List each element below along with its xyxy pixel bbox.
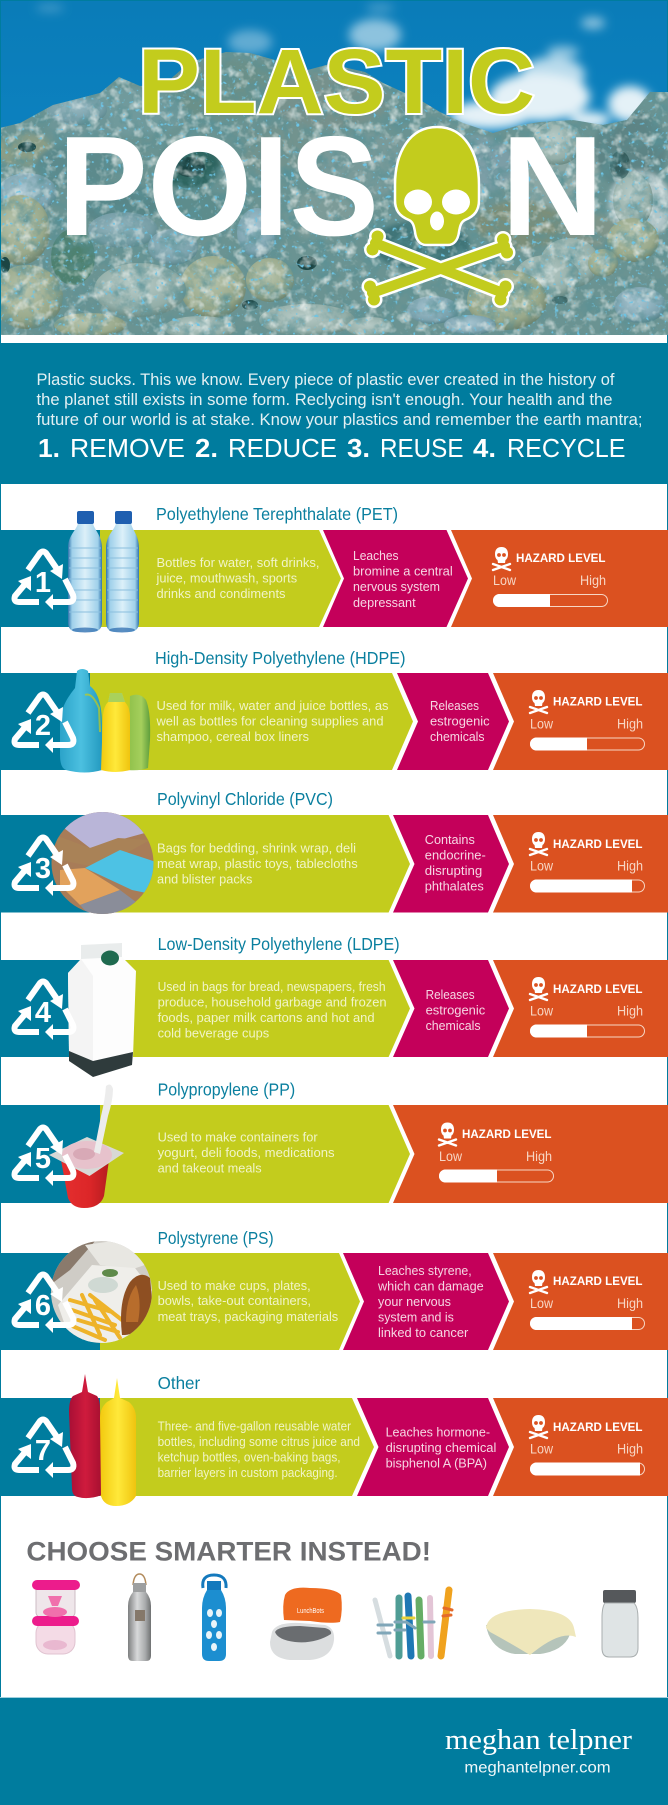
usage text: bottles, including some citrus juice and bbox=[158, 1435, 360, 1449]
hazard level meter: Low bbox=[439, 1149, 462, 1164]
risk text bbox=[425, 833, 486, 894]
earth mantra: REUSE bbox=[380, 435, 464, 463]
risk text: chemicals bbox=[426, 1019, 481, 1033]
hazard level meter: Low bbox=[530, 1004, 553, 1018]
panel: 5 PP bbox=[1, 1080, 668, 1208]
panel: 7 Other: Other bbox=[158, 1373, 200, 1393]
usage text: Used for milk, water and juice bottles, as bbox=[156, 699, 388, 713]
risk text bbox=[426, 988, 485, 1033]
title: POISON: N bbox=[501, 107, 604, 266]
risk text: disrupting chemical bbox=[386, 1441, 496, 1455]
white band under hero bbox=[1, 335, 667, 343]
risk text bbox=[386, 1426, 496, 1471]
usage text: produce, household garbage and frozen bbox=[158, 996, 387, 1010]
earth mantra: 2. bbox=[195, 435, 218, 463]
usage text: Three- and five-gallon reusable water bbox=[158, 1420, 351, 1434]
intro text: Plastic sucks. This we know. Every piece of plastic ever created in the history of bbox=[36, 370, 615, 389]
usage text: Used to make cups, plates, bbox=[158, 1279, 311, 1293]
hazard level meter: High bbox=[617, 716, 643, 732]
icon: lunch box: LunchBots bbox=[297, 1608, 324, 1615]
hazard level meter: HAZARD LEVEL bbox=[553, 696, 642, 708]
image: food in polystyrene tray bbox=[50, 1240, 154, 1345]
icon: recycle 4 bbox=[14, 982, 73, 1040]
risk text: endocrine- bbox=[425, 848, 486, 862]
hazard level meter: Low bbox=[530, 858, 553, 874]
icon: recycle 1 bbox=[14, 552, 73, 610]
title: PLASTIC: PLASTIC bbox=[138, 31, 535, 133]
risk text bbox=[377, 1264, 484, 1340]
hazard level meter: Low bbox=[530, 1442, 553, 1456]
usage text: meat wrap, plastic toys, tablecloths bbox=[157, 857, 358, 871]
earth mantra: REMOVE bbox=[70, 435, 185, 463]
risk text: which can damage bbox=[377, 1280, 484, 1294]
hazard level meter bbox=[530, 832, 644, 892]
risk text: disrupting bbox=[425, 864, 482, 878]
icon: beeswax wrap bowl bbox=[486, 1609, 576, 1655]
panel: 4 LDPE: Low-Density Polyethylene (LDPE) bbox=[158, 934, 400, 954]
icon: mason jar bbox=[602, 1590, 638, 1657]
icon: blue glass bottle bbox=[202, 1575, 226, 1661]
title: POISON bbox=[58, 107, 604, 266]
icon: recycle 3 bbox=[14, 838, 73, 896]
earth mantra: 4. bbox=[473, 435, 496, 463]
panel: 4 LDPE bbox=[1, 934, 668, 1077]
icon: pink glass containers bbox=[32, 1580, 80, 1654]
icon: recycle 7 bbox=[14, 1420, 73, 1478]
icon: recycle 2 bbox=[14, 694, 73, 753]
icon: recycle 5: 5 bbox=[35, 1143, 51, 1175]
panel: 3 PVC: Polyvinyl Chloride (PVC) bbox=[157, 789, 333, 809]
footer url: meghantelpner.com bbox=[464, 1760, 611, 1777]
usage text: well as bottles for cleaning supplies and bbox=[155, 714, 384, 728]
usage text: meat trays, packaging materials bbox=[158, 1310, 338, 1324]
risk text: Leaches styrene, bbox=[378, 1264, 472, 1278]
image: ketchup and mustard bottles bbox=[69, 1374, 136, 1506]
hazard level meter bbox=[493, 547, 608, 607]
white content area bbox=[1, 484, 667, 1697]
intro text bbox=[36, 370, 642, 429]
icon: glass straws bbox=[375, 1590, 452, 1656]
risk text: depressant bbox=[353, 596, 416, 610]
risk text: Leaches hormone- bbox=[386, 1426, 490, 1440]
risk text: Releases bbox=[426, 988, 475, 1002]
usage text: ketchup bottles, oven-baking bags, bbox=[158, 1451, 341, 1465]
icon: recycle 5 bbox=[14, 1128, 73, 1186]
usage text: Used to make containers for bbox=[158, 1131, 318, 1145]
risk text: chemicals bbox=[430, 730, 484, 744]
risk text: your nervous bbox=[378, 1295, 451, 1309]
hazard level meter: High bbox=[617, 1296, 643, 1311]
image: milk carton bbox=[68, 943, 136, 1077]
image: detergent and shampoo bottles bbox=[60, 669, 150, 772]
icon: recycle 4: 4 bbox=[35, 997, 51, 1029]
hero photo: heap of plastic under blue sky bbox=[0, 0, 668, 340]
icon: recycle 6: 6 bbox=[35, 1290, 51, 1322]
usage text: barrier layers in custom packaging. bbox=[158, 1466, 338, 1480]
panel: 1 PET: Polyethylene Terephthalate (PET) bbox=[156, 504, 398, 524]
usage text: Used in bags for bread, newspapers, fresh bbox=[158, 980, 386, 994]
usage text: shampoo, cereal box liners bbox=[156, 730, 309, 744]
hazard level meter: HAZARD LEVEL bbox=[553, 839, 642, 851]
usage text: foods, paper milk cartons and hot and bbox=[158, 1011, 375, 1025]
risk text: bisphenol A (BPA) bbox=[386, 1457, 487, 1471]
usage text: juice, mouthwash, sports bbox=[155, 572, 297, 586]
earth mantra: REDUCE bbox=[228, 435, 337, 463]
risk text bbox=[353, 549, 453, 610]
icon: recycle 3: 3 bbox=[35, 853, 51, 885]
panel: 7 Other bbox=[1, 1373, 668, 1506]
image: water bottles bbox=[68, 511, 139, 632]
icon: recycle 7: 7 bbox=[35, 1435, 51, 1467]
hazard level meter: HAZARD LEVEL bbox=[553, 1276, 642, 1288]
intro text: future of our world is at stake. Know your plastics and remember the earth mantra; bbox=[36, 410, 642, 429]
panel: 2 HDPE: High-Density Polyethylene (HDPE) bbox=[155, 648, 406, 668]
risk text: nervous system bbox=[353, 580, 440, 594]
footer band bbox=[0, 1697, 668, 1805]
usage text: and blister packs bbox=[157, 872, 252, 886]
hazard level meter bbox=[530, 690, 644, 750]
risk text: Leaches bbox=[353, 549, 399, 563]
hazard level meter: Low bbox=[493, 573, 516, 588]
earth mantra: 3. bbox=[347, 435, 370, 463]
risk text: linked to cancer bbox=[378, 1326, 468, 1340]
hazard level meter: High bbox=[617, 1442, 643, 1456]
icon: skull and crossbones bbox=[362, 127, 516, 308]
usage text: drinks and condiments bbox=[156, 587, 286, 601]
panel: 6 PS: Polystyrene (PS) bbox=[158, 1228, 274, 1248]
risk text: Releases bbox=[430, 699, 479, 713]
usage text bbox=[155, 556, 320, 601]
risk text: bromine a central bbox=[353, 565, 453, 579]
image: PVC sheets circle bbox=[50, 812, 156, 916]
hazard level meter: HAZARD LEVEL bbox=[516, 553, 605, 565]
icon: steel bottle bbox=[128, 1574, 151, 1661]
hazard level meter: High bbox=[617, 858, 643, 874]
icon: recycle 1: 1 bbox=[35, 567, 51, 599]
risk text: phthalates bbox=[425, 880, 484, 894]
hazard level meter bbox=[530, 1270, 644, 1330]
usage text bbox=[158, 980, 387, 1040]
risk text: system and is bbox=[378, 1311, 454, 1325]
usage text: Bags for bedding, shrink wrap, deli bbox=[157, 842, 356, 856]
usage text: yogurt, deli foods, medications bbox=[158, 1146, 335, 1160]
usage text: Bottles for water, soft drinks, bbox=[156, 556, 320, 570]
panel: 6 PS bbox=[1, 1228, 668, 1350]
heading: choose smarter: CHOOSE SMARTER INSTEAD! bbox=[26, 1537, 431, 1567]
hazard level meter: HAZARD LEVEL bbox=[462, 1129, 551, 1141]
risk text: estrogenic bbox=[426, 1004, 485, 1018]
risk text: estrogenic bbox=[430, 714, 490, 728]
hazard level meter: High bbox=[526, 1149, 552, 1164]
footer brand: meghan telpner bbox=[445, 1724, 632, 1756]
icon: recycle 2: 2 bbox=[35, 710, 51, 742]
hazard level meter: Low bbox=[530, 716, 553, 732]
hazard level meter: Low bbox=[530, 1296, 553, 1311]
hazard level meter bbox=[530, 977, 644, 1038]
usage text: cold beverage cups bbox=[158, 1026, 269, 1040]
intro text: the planet still exists in some form. Reclycing isn't enough. Your health and the bbox=[36, 390, 612, 409]
risk text bbox=[430, 699, 490, 744]
icon: lunch box bbox=[270, 1588, 342, 1660]
hazard level meter: High bbox=[580, 573, 606, 588]
earth mantra: RECYCLE bbox=[507, 435, 626, 463]
usage text bbox=[155, 699, 388, 744]
risk text: Contains bbox=[425, 833, 475, 847]
usage text bbox=[158, 1279, 338, 1324]
hazard level meter: High bbox=[617, 1004, 643, 1018]
earth mantra: 1. bbox=[38, 435, 60, 463]
icon: recycle 6 bbox=[14, 1274, 73, 1333]
panel: 5 PP: Polypropylene (PP) bbox=[158, 1080, 295, 1100]
panel: 3 PVC bbox=[1, 789, 668, 916]
hazard level meter bbox=[530, 1415, 644, 1476]
title: POISON: POIS bbox=[58, 107, 379, 266]
hazard level meter bbox=[439, 1122, 554, 1182]
hazard level meter: HAZARD LEVEL bbox=[553, 984, 642, 996]
earth mantra bbox=[38, 435, 626, 463]
usage text bbox=[158, 1131, 335, 1176]
image: yogurt cup with spoon bbox=[49, 1085, 124, 1208]
usage text bbox=[157, 842, 358, 886]
panel: 1 PET bbox=[1, 504, 668, 632]
usage text: and takeout meals bbox=[158, 1162, 262, 1176]
usage text bbox=[158, 1420, 360, 1480]
panel: 2 HDPE bbox=[1, 648, 668, 772]
hazard level meter: HAZARD LEVEL bbox=[553, 1422, 642, 1434]
usage text: bowls, take-out containers, bbox=[158, 1294, 311, 1308]
